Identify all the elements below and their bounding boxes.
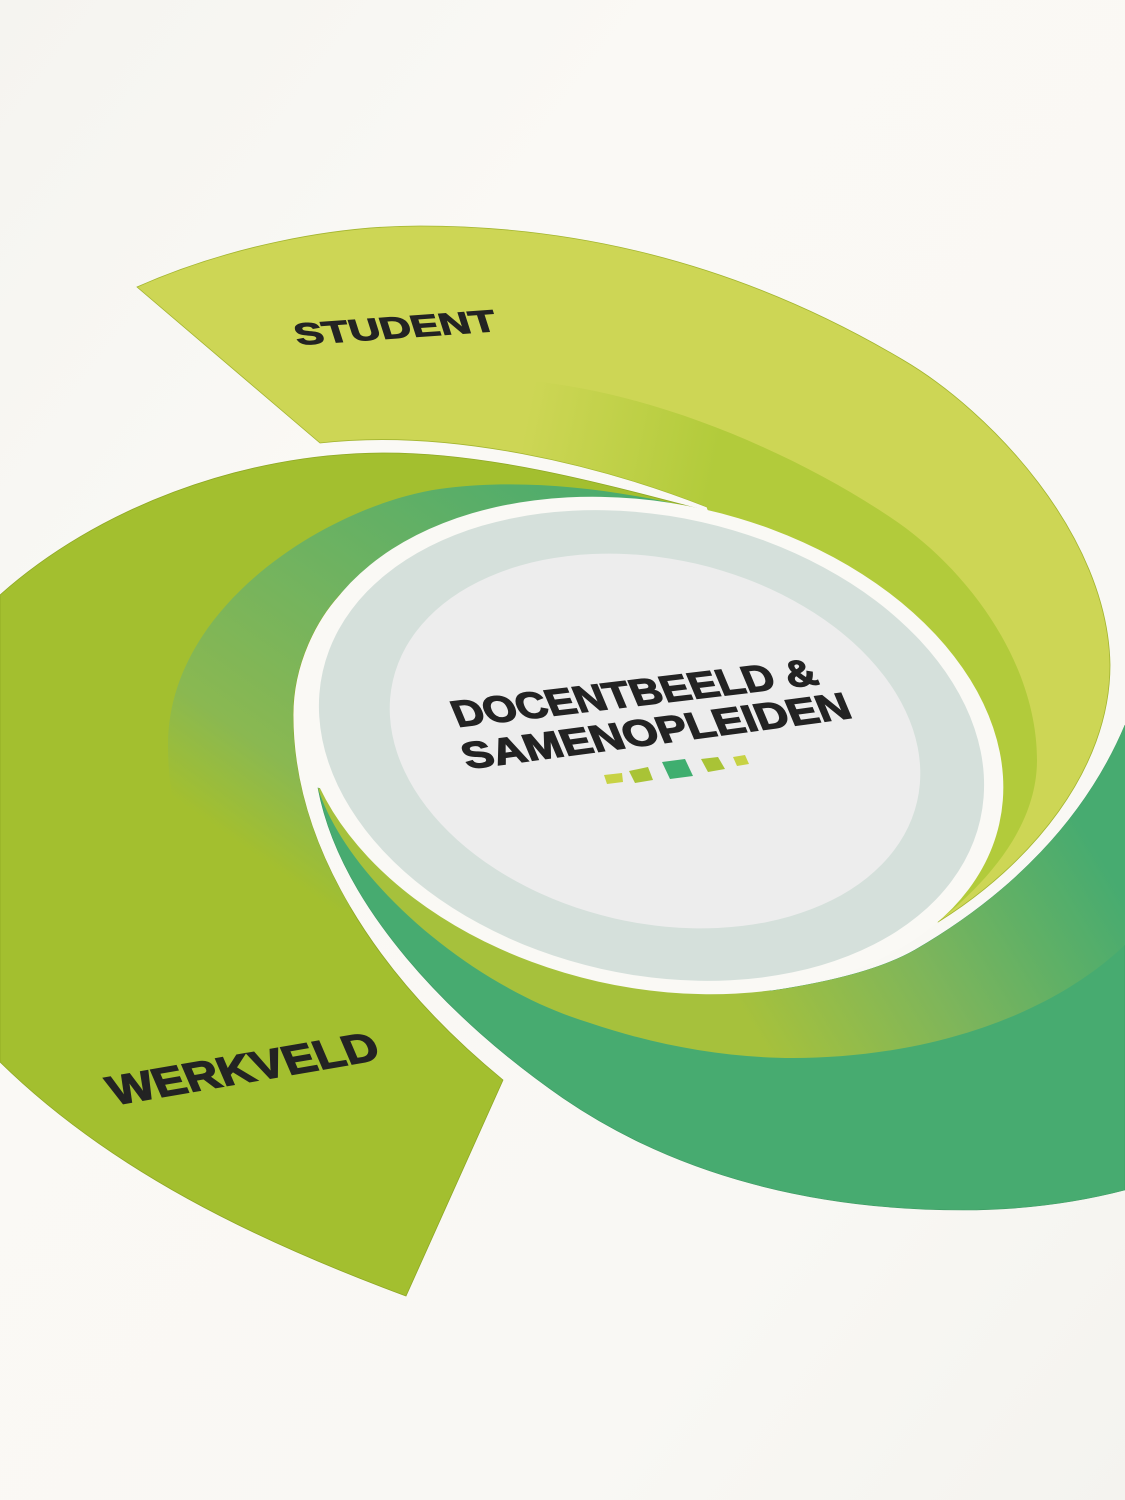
student inner band	[522, 381, 1037, 922]
title: docentbeeld & samenopleiden: SAMENOPLEIDEN	[454, 685, 857, 777]
werkveld inner band	[168, 484, 703, 940]
panel: student swirl	[137, 226, 1110, 922]
title: docentbeeld & samenopleiden: DOCENTBEELD &	[444, 651, 824, 735]
werkveld arm	[0, 453, 703, 1296]
center circle	[251, 431, 1052, 1060]
white ring	[251, 431, 1052, 1060]
green arm	[318, 725, 1125, 1210]
label: werkveld: WERKVELD	[100, 1023, 386, 1114]
center disc	[352, 503, 958, 979]
icon: row of squares	[604, 755, 749, 784]
panel: werkveld swirl	[0, 453, 703, 1296]
grey-green ring	[272, 448, 1031, 1043]
green inner band	[318, 725, 1125, 1058]
label: student: STUDENT	[289, 304, 501, 351]
panel: green swirl	[318, 725, 1125, 1210]
student arm	[137, 226, 1110, 922]
